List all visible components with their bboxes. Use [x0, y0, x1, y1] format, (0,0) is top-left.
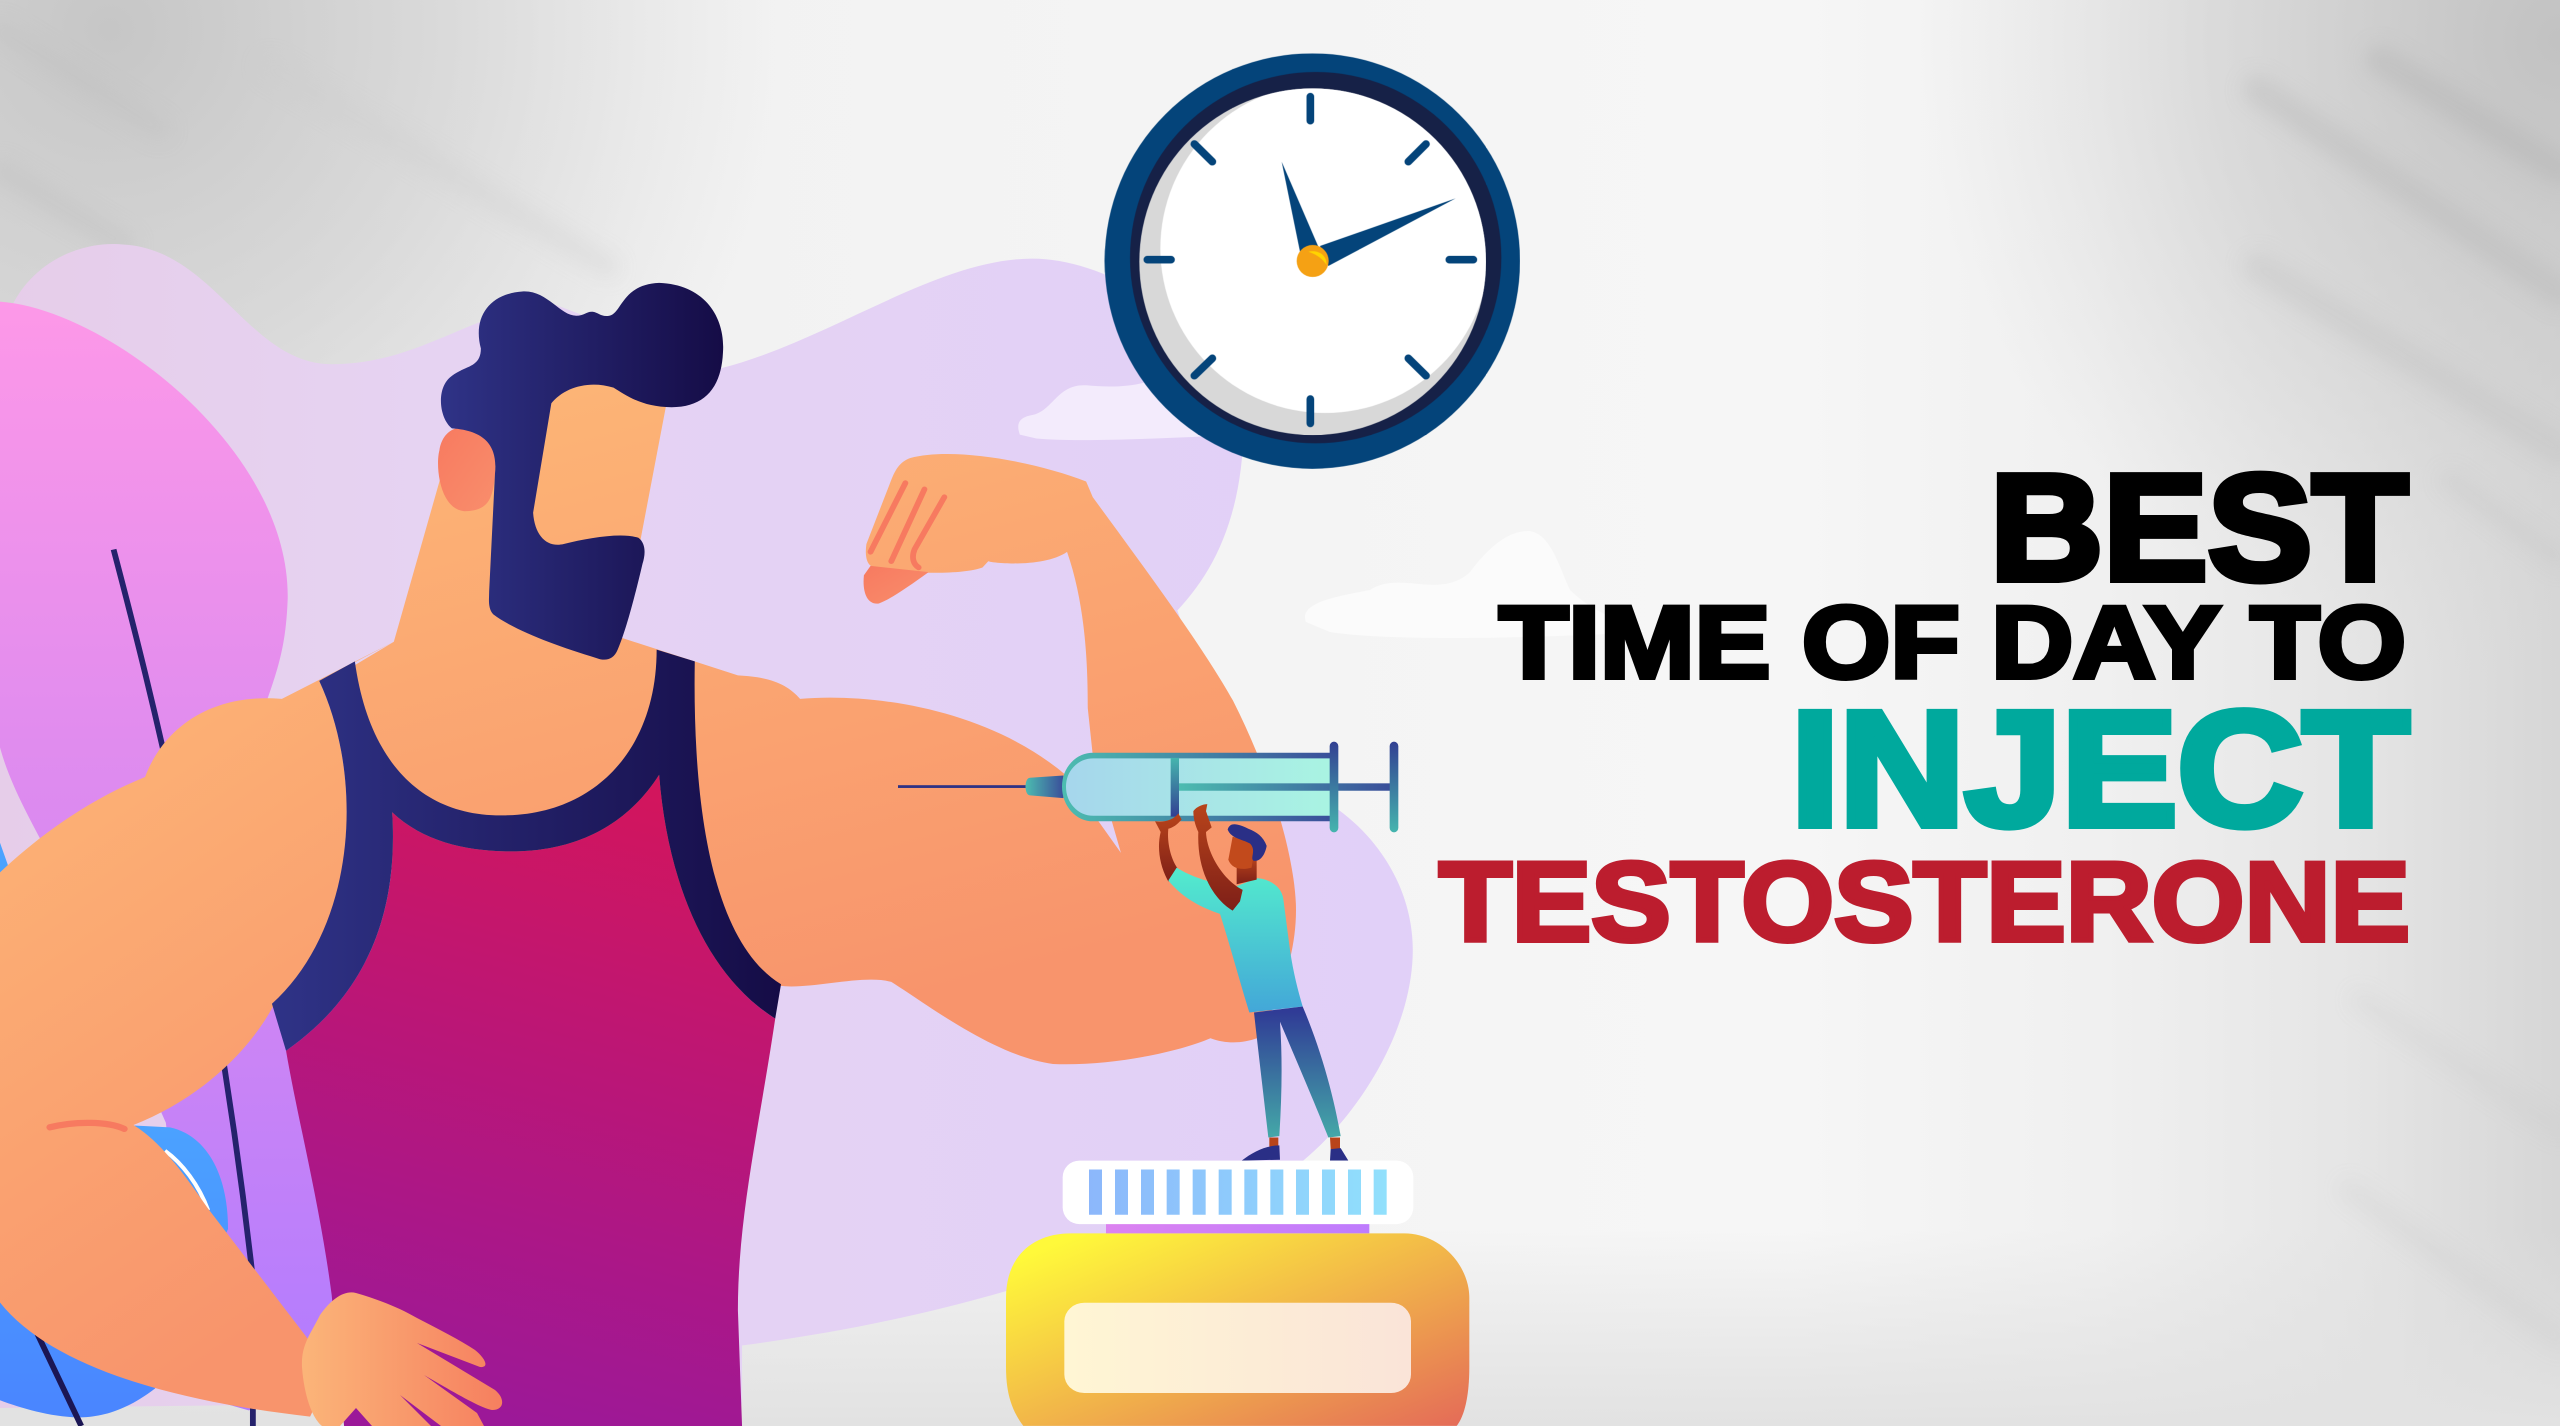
plant leaf: blue — [0, 1125, 228, 1417]
needle hub — [1025, 775, 1063, 798]
thumb rest — [1390, 742, 1398, 832]
ear — [438, 428, 495, 511]
clock outer ring — [1105, 53, 1520, 469]
bottle — [1006, 1161, 1469, 1426]
title line: BEST: BEST — [1990, 442, 2408, 612]
tank top body — [286, 775, 775, 1426]
barrel flange — [1330, 742, 1338, 832]
cap ridges — [1089, 1169, 1387, 1215]
clock hands — [1282, 162, 1456, 266]
barrel — [1064, 756, 1333, 819]
plant stem lower — [37, 1334, 81, 1426]
background blob: lilac — [0, 244, 1413, 1408]
shirt — [1168, 868, 1303, 1012]
title line: TIME OF DAY TO: TIME OF DAY TO — [1499, 586, 2406, 700]
plant stem — [114, 550, 253, 1426]
small figure holding syringe — [1155, 804, 1348, 1161]
front arm — [1193, 804, 1243, 911]
bottle neck — [1106, 1223, 1369, 1233]
plunger seal — [1171, 758, 1179, 817]
clock inner ring — [1130, 72, 1501, 443]
hair — [1228, 824, 1267, 861]
arm crease — [50, 1123, 124, 1129]
clock ticks — [1147, 97, 1473, 423]
bottle body — [1006, 1233, 1469, 1426]
plant leaf: small blue edge — [0, 843, 10, 888]
title — [1439, 442, 2410, 964]
cloud behind clock — [1018, 376, 1244, 440]
plant leaf vein — [165, 1151, 208, 1210]
hair and beard — [441, 283, 723, 660]
needle — [898, 785, 1028, 788]
back arm — [1155, 813, 1182, 881]
socks — [1269, 1137, 1340, 1149]
left arm skin — [0, 642, 394, 1417]
face — [1228, 837, 1255, 869]
clock — [1105, 53, 1520, 469]
torso and right arm skin — [348, 356, 1296, 1064]
muscular man with plants — [0, 283, 1296, 1426]
shoes — [1242, 1145, 1348, 1161]
title line: INJECT: INJECT — [1791, 677, 2409, 860]
trousers — [1254, 1006, 1341, 1137]
tank top straps — [272, 650, 781, 1051]
plant leaf: pink — [0, 302, 373, 1410]
fist knuckle lines — [871, 483, 944, 567]
syringe — [898, 742, 1398, 832]
raised fist fingertip — [864, 566, 929, 604]
cloud faint — [1305, 531, 1645, 638]
plunger rod — [1179, 783, 1391, 791]
clock face — [1139, 88, 1486, 436]
neck — [1237, 857, 1257, 884]
bottle label — [1064, 1303, 1411, 1393]
hand on hip — [302, 1292, 502, 1426]
bottle cap — [1063, 1161, 1413, 1224]
title line: TESTOSTERONE: TESTOSTERONE — [1439, 840, 2410, 964]
clock centre pin — [1297, 245, 1329, 277]
